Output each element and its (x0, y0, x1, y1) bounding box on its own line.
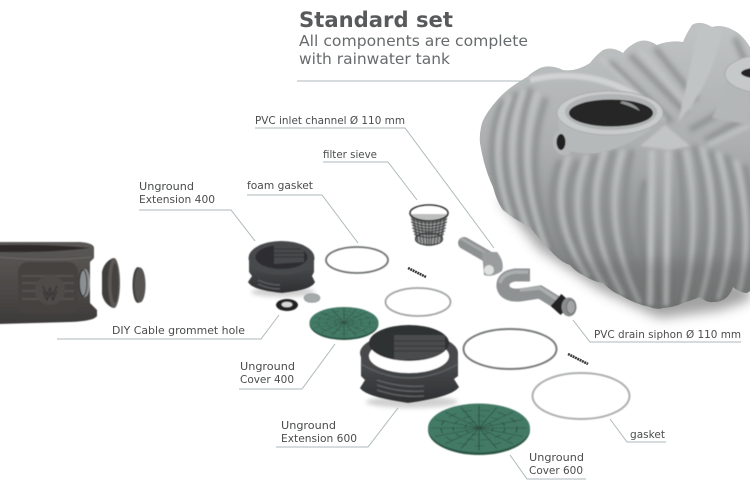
label: filter sieve: filter sieve (323, 148, 377, 161)
label: Unground Cover 600: Cover 600 (529, 464, 583, 477)
filter sieve (410, 205, 448, 246)
gasket ring light (532, 373, 630, 419)
ring grey (386, 288, 450, 316)
label: Unground Cover 400: Cover 400 (240, 373, 294, 386)
label: foam gasket: foam gasket (247, 179, 314, 192)
label: Unground Extension 600: Unground (281, 419, 336, 432)
PVC inlet channel pipe (462, 239, 503, 276)
DIY cable extension body (0, 242, 97, 324)
label: Unground Cover 600 (510, 451, 586, 479)
second tank opening (726, 57, 750, 91)
gasket ring dark (464, 329, 556, 369)
label: PVC inlet channel (255, 114, 494, 248)
subtitle: with rainwater tank (299, 50, 450, 68)
label: filter sieve (323, 148, 417, 200)
line: standard set (297, 80, 530, 82)
foam gasket ring (326, 247, 388, 273)
subtitle: All components are complete (299, 32, 528, 50)
screw large (568, 354, 588, 364)
label: Unground Cover 400: Unground (240, 360, 295, 373)
plug disc (304, 294, 320, 302)
label: Unground Cover 600: Unground (529, 451, 584, 464)
label: Unground Extension 400: Extension 400 (139, 193, 215, 206)
screw small (408, 268, 426, 277)
label: Unground Extension 400 (139, 180, 255, 241)
label: PVC drain siphon: PVC drain siphon Ø 110 mm (594, 328, 741, 341)
label: gasket: gasket (630, 428, 666, 441)
label: foam gasket (247, 179, 358, 243)
label: Unground Extension 600 (276, 408, 398, 447)
grommet sleeve (102, 258, 120, 308)
Unground cover 600 (428, 404, 530, 455)
label: Unground Cover 400 (239, 344, 335, 389)
label: Unground Extension 400: Unground (139, 180, 194, 193)
grommet plug (132, 267, 146, 303)
tank side port (553, 129, 575, 155)
Unground extension 600 (360, 325, 459, 408)
Unground extension 400 (248, 241, 315, 297)
subtitle (299, 32, 528, 68)
washer (276, 299, 298, 311)
PVC drain siphon (500, 272, 576, 316)
label: DIY Cable grommet hole: DIY Cable grommet hole (112, 324, 245, 337)
label: PVC drain siphon (573, 320, 741, 342)
rainwater tank (470, 15, 750, 322)
title: Standard set (299, 8, 453, 32)
label: DIY Cable grommet hole (57, 315, 279, 339)
Unground cover 400 (310, 307, 378, 340)
icon: logo mark (43, 286, 57, 300)
label: gasket (610, 419, 666, 442)
tank neck (557, 91, 663, 154)
label: Unground Extension 600: Extension 600 (281, 432, 357, 445)
label: PVC inlet channel: PVC inlet channel Ø 110 mm (255, 114, 405, 127)
